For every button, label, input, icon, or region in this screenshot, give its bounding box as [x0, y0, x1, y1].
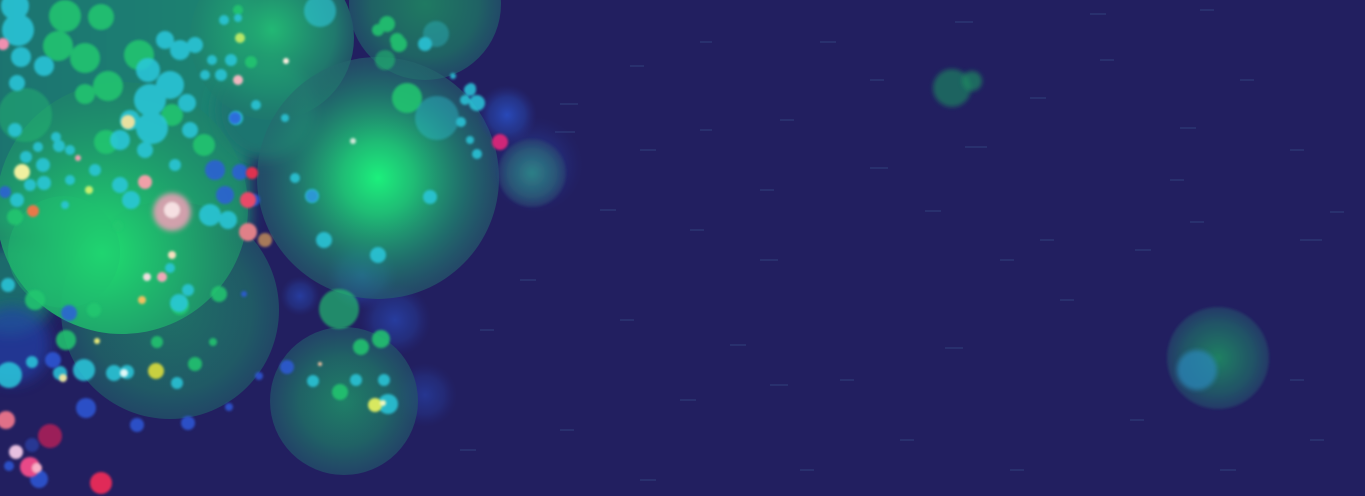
blue halo and teal orb at right of main sphere	[477, 85, 583, 213]
blue bubbles	[0, 112, 318, 488]
lower sphere	[270, 327, 418, 475]
dim upper-right pair of orbs	[933, 69, 982, 107]
small bright sphere: far left	[8, 196, 120, 308]
right orb with blue core	[1167, 307, 1269, 409]
large dim sphere: lower left	[61, 201, 279, 419]
cyan bubbles in cluster	[0, 0, 485, 414]
main sphere	[257, 57, 499, 299]
bright yellow and white sparkles	[14, 33, 386, 412]
blue glow behind main sphere	[280, 239, 457, 427]
backdrop cluster glow	[0, 0, 315, 383]
pink and red bubbles	[0, 38, 508, 494]
upper sphere	[190, 0, 354, 120]
faint scan-line dashes	[460, 10, 1344, 480]
top sphere	[349, 0, 501, 80]
large bright sphere: left	[0, 82, 248, 334]
soft green bubbles in cluster	[0, 0, 422, 400]
